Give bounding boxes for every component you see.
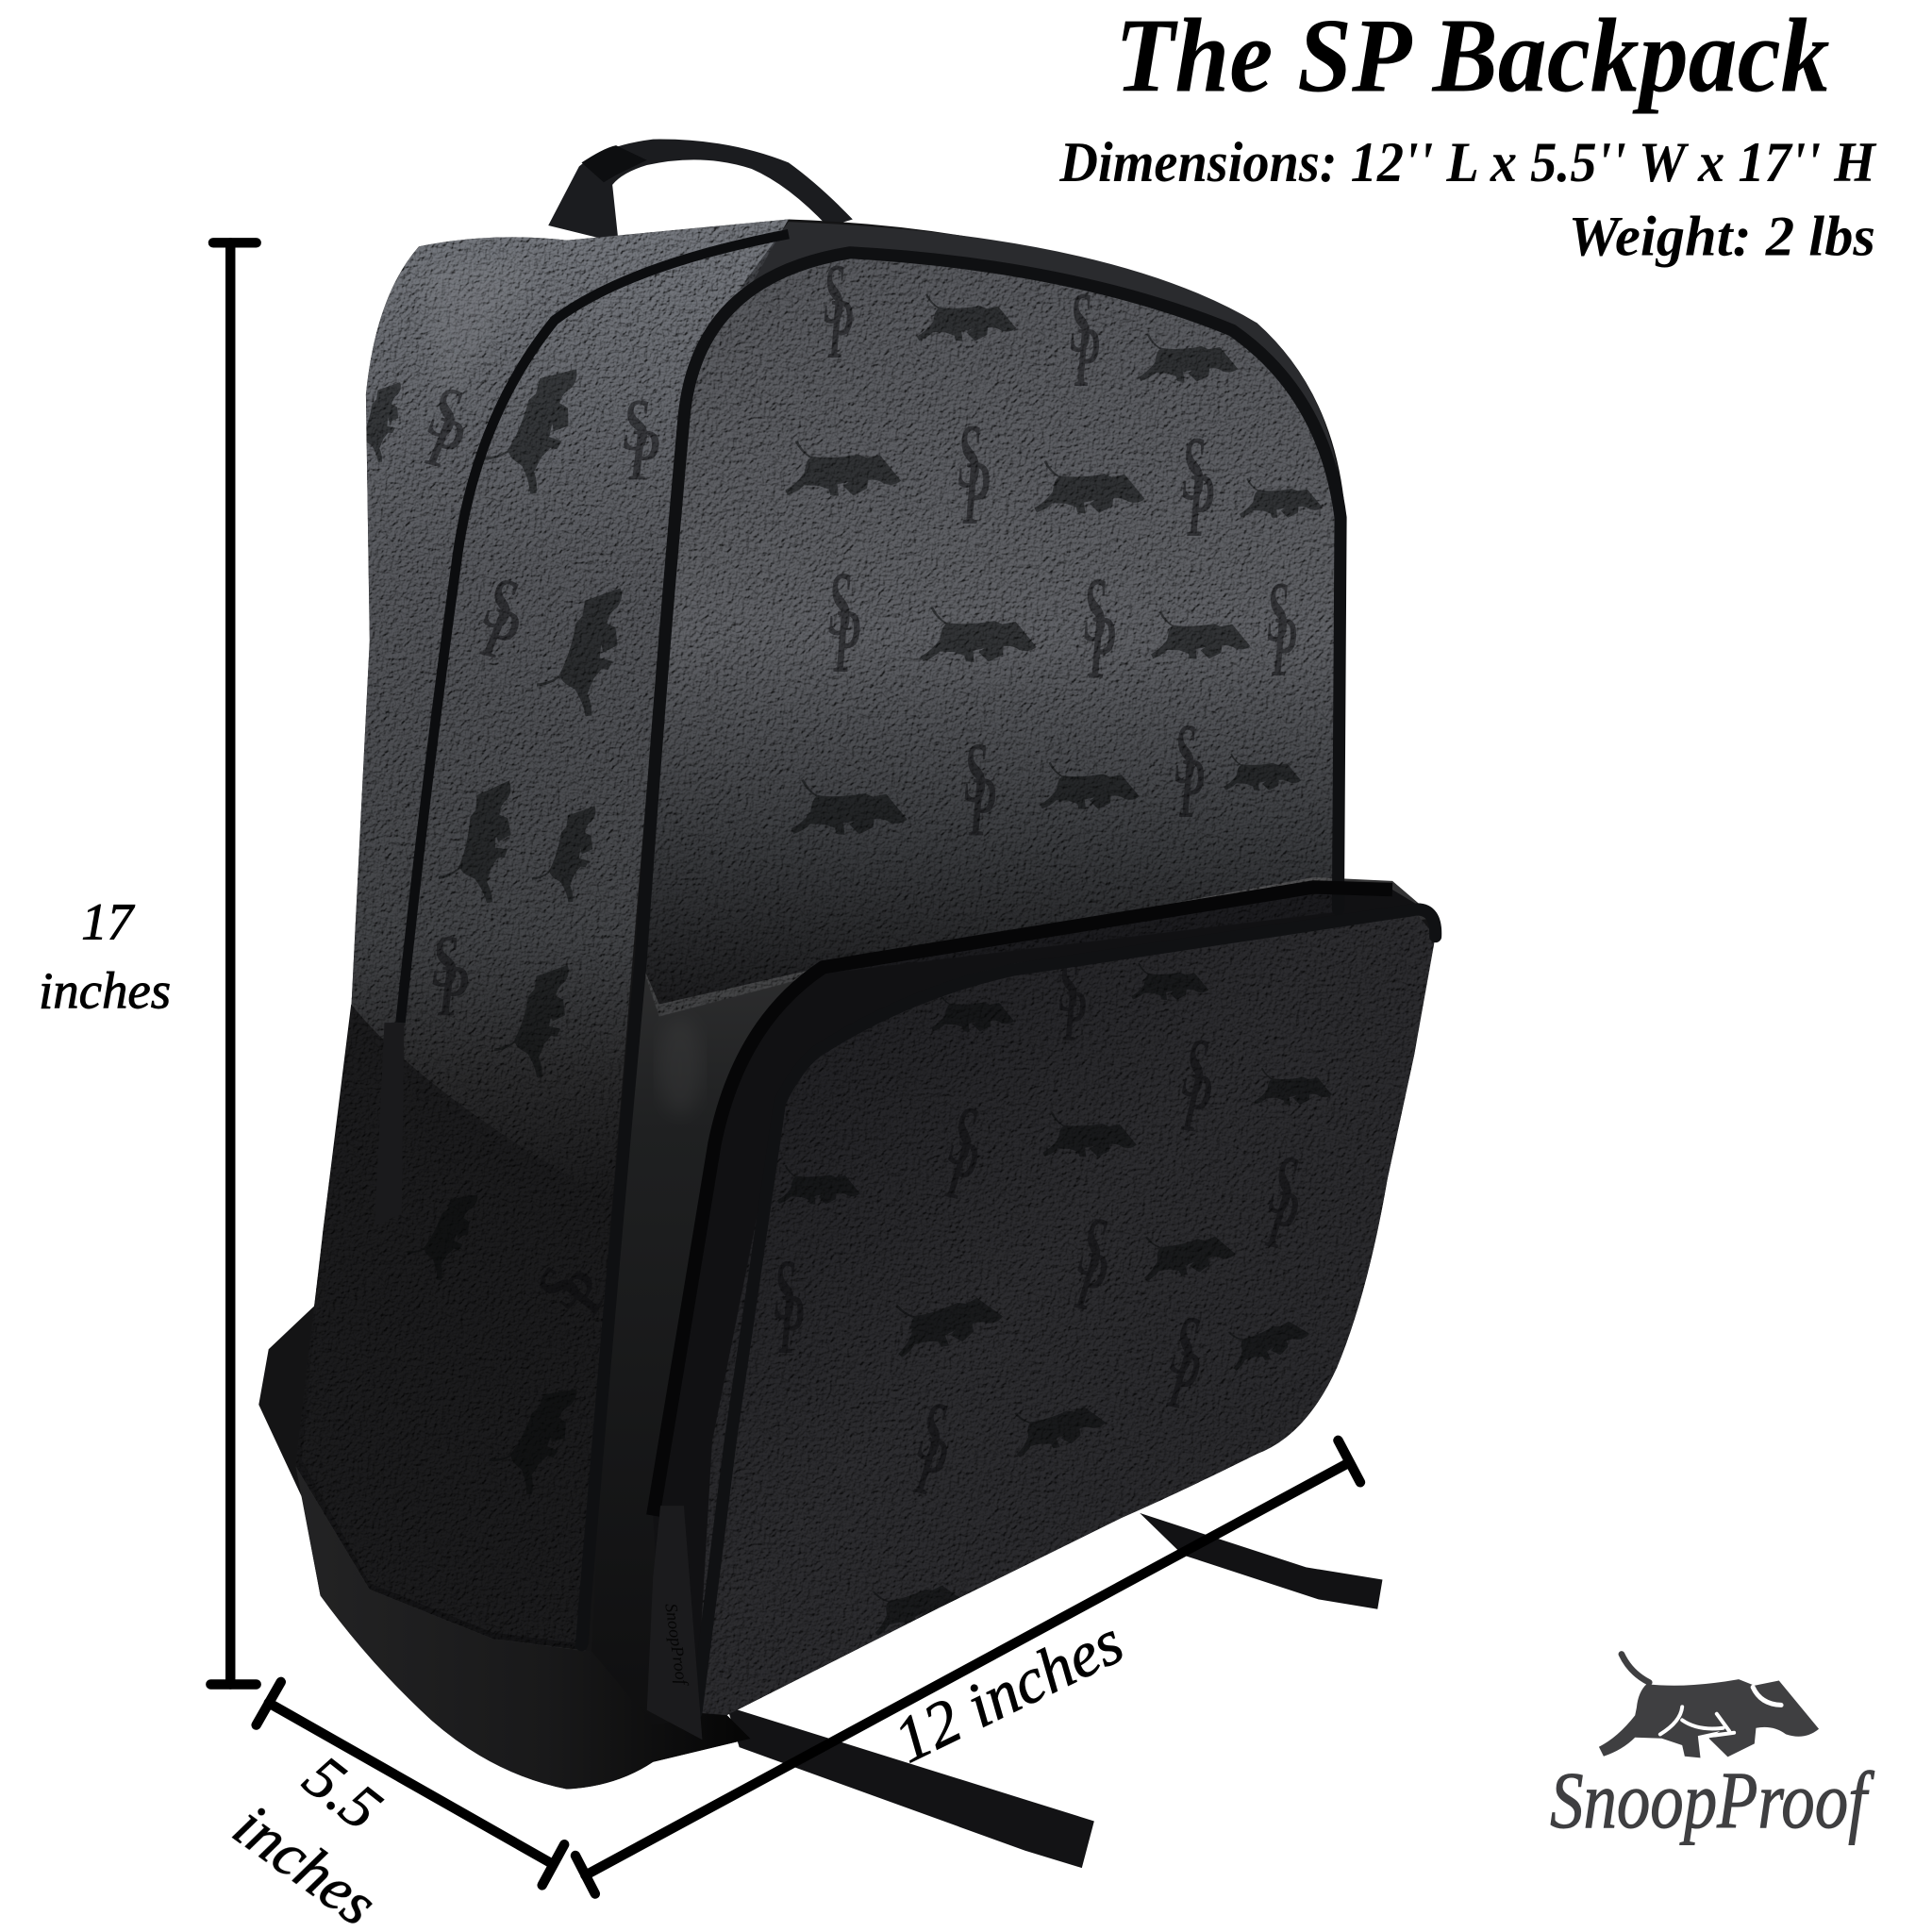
pocket emboss pattern: S [1263, 1136, 1305, 1234]
side zipper [400, 234, 789, 1023]
front panel emboss pattern: P [1074, 309, 1099, 405]
pocket emboss pattern: S [1058, 946, 1079, 1027]
side panel emboss pattern: P [475, 591, 526, 678]
label: height: inches [39, 961, 171, 1019]
pocket emboss pattern: S [1073, 1198, 1114, 1296]
side panel emboss pattern: P [419, 400, 471, 487]
dimension line: width [257, 1682, 564, 1885]
main piping [581, 253, 1341, 1645]
logo wordmark: SnoopProof [1550, 1755, 1874, 1845]
side lower seam panel [302, 1004, 610, 1645]
side panel emboss pattern: S [523, 1257, 596, 1318]
label: length: 12 inches [883, 1605, 1134, 1776]
handle wrap [581, 145, 647, 182]
front panel emboss pattern: S [828, 553, 853, 655]
front panel emboss pattern: S [1267, 564, 1290, 660]
gusset highlight [658, 1017, 702, 1115]
side panel emboss pattern: P [437, 951, 469, 1032]
label: height: 17 [81, 892, 136, 950]
pocket emboss pattern: S [912, 1383, 954, 1481]
leather texture [283, 216, 1441, 1725]
logo [1550, 1654, 1874, 1845]
pocket emboss pattern: S [1178, 1019, 1213, 1117]
front panel emboss pattern: P [1187, 454, 1214, 557]
pocket emboss pattern: P [908, 1417, 954, 1516]
front panel emboss pattern: S [958, 405, 982, 508]
front strap [727, 1707, 1094, 1868]
side panel emboss pattern: P [627, 415, 659, 496]
pocket emboss pattern: P [1062, 975, 1086, 1057]
highlight top [419, 260, 542, 407]
pocket emboss pattern: P [1069, 1232, 1113, 1331]
front panel emboss pattern: P [1088, 595, 1115, 698]
zipper pull text: SnoopProof [661, 1602, 692, 1689]
front panel emboss pattern [785, 246, 1323, 855]
pocket zipper [653, 887, 1392, 1516]
pocket emboss pattern: P [1161, 1331, 1206, 1429]
pocket face [696, 914, 1436, 1715]
side panel emboss pattern [344, 350, 659, 1497]
base [295, 1466, 750, 1789]
zipper pull side [375, 1023, 404, 1226]
pocket emboss pattern: P [1260, 1171, 1305, 1270]
dimension line: length [575, 1441, 1360, 1894]
pocket emboss pattern: P [940, 1122, 984, 1220]
front panel emboss pattern: P [962, 441, 990, 544]
pocket emboss pattern [774, 946, 1332, 1637]
pocket emboss pattern: S [774, 1242, 796, 1338]
pocket fabric band [653, 887, 1424, 1713]
logo dog icon [1599, 1654, 1819, 1757]
dimension line: height [210, 242, 257, 1684]
pocket emboss pattern: S [1165, 1296, 1207, 1394]
side panel emboss pattern: S [623, 385, 650, 466]
front panel emboss pattern: S [1174, 707, 1197, 802]
side panel emboss pattern: S [477, 561, 525, 647]
pocket emboss pattern: S [942, 1087, 985, 1185]
front panel emboss pattern: P [1271, 599, 1296, 694]
dimensions text: Dimensions: 12'' L x 5.5'' W x 17'' H [1058, 130, 1877, 193]
back strap rear [1140, 1513, 1382, 1609]
label: width: 5.5 [291, 1742, 393, 1843]
front panel emboss pattern: P [833, 590, 860, 692]
pocket piping [696, 909, 1436, 1713]
side panel emboss pattern: S [422, 371, 470, 456]
pocket emboss pattern: P [778, 1276, 804, 1373]
front panel emboss pattern: S [824, 246, 845, 342]
front panel emboss pattern: S [964, 724, 988, 820]
side panel emboss pattern: S [432, 922, 459, 1003]
front panel emboss pattern: S [1070, 275, 1092, 371]
title: The SP Backpack [1115, 0, 1830, 115]
pocket emboss pattern: P [1177, 1054, 1216, 1152]
bag silhouette [258, 219, 1436, 1789]
front panel emboss pattern: S [1182, 417, 1206, 520]
handle [548, 140, 853, 242]
backpack [258, 140, 1441, 1868]
zipper pull pocket [647, 1506, 702, 1740]
front panel emboss pattern: P [968, 759, 996, 855]
front panel [641, 253, 1341, 1017]
top edge [740, 222, 1343, 591]
side panel [295, 219, 789, 1651]
weight text: Weight: 2 lbs [1569, 204, 1875, 267]
gusset [591, 877, 1436, 1725]
side panel emboss pattern: P [547, 1261, 623, 1325]
front panel emboss pattern: P [1178, 741, 1204, 836]
label: height [39, 892, 171, 1019]
front panel emboss pattern: P [827, 281, 853, 376]
front panel emboss pattern: S [1083, 558, 1108, 661]
